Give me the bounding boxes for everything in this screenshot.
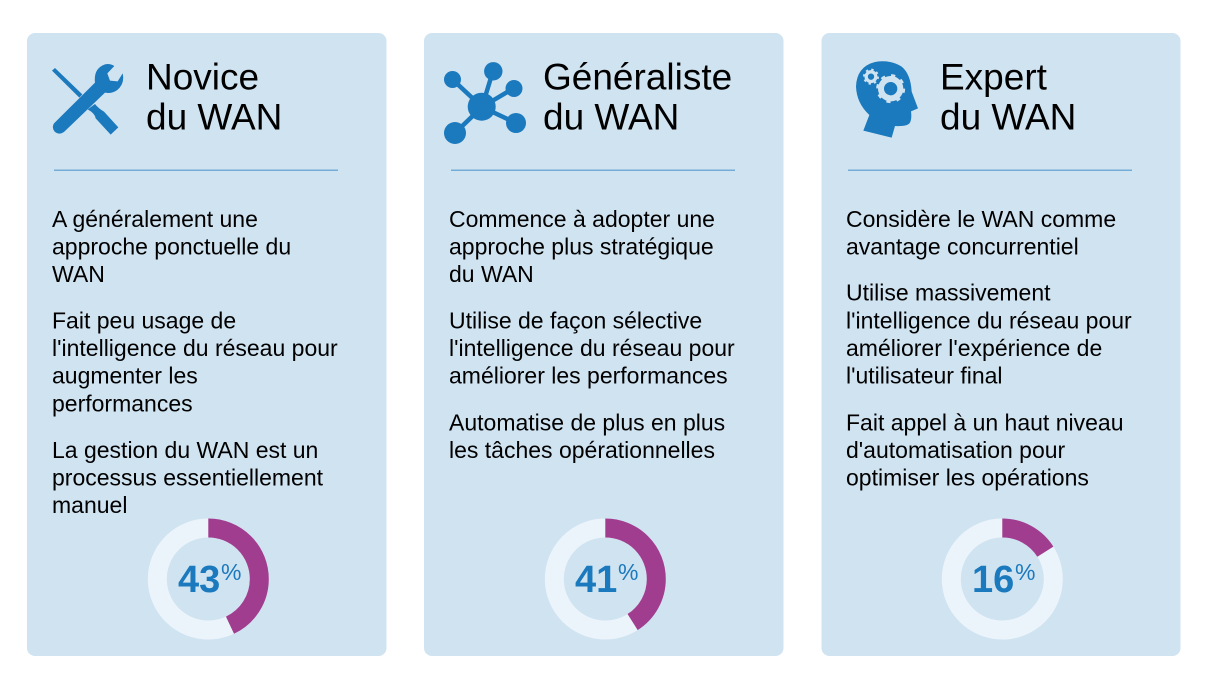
- text block: novice description: WAN: [52, 261, 105, 287]
- icon: wrench and screwdriver: [52, 64, 123, 135]
- text block: expert description: Utilise massivement: [846, 280, 1051, 306]
- text block: expert description: optimiser les opérations: [846, 464, 1089, 490]
- title: expert: Expert: [940, 56, 1048, 98]
- donut chart: 43 percent: %: [221, 559, 241, 585]
- donut chart: 16 percent: [951, 528, 1053, 630]
- title: novice: du WAN: [146, 96, 282, 138]
- text block: expert description: améliorer l'expérience de: [846, 335, 1102, 361]
- text block: novice description: processus essentiellement: [52, 464, 324, 490]
- text block: novice description: [52, 206, 338, 518]
- title: novice: Novice: [146, 56, 259, 98]
- donut chart: 16 percent: %: [1015, 559, 1035, 585]
- text block: expert description: [846, 206, 1132, 490]
- icon: head with gears: [856, 61, 918, 138]
- title: novice: [146, 56, 282, 138]
- text block: generaliste description: améliorer les performances: [449, 362, 728, 388]
- donut chart: 43 percent: [157, 528, 259, 630]
- text block: expert description: avantage concurrentiel: [846, 234, 1079, 260]
- text block: expert description: l'intelligence du réseau pour: [846, 308, 1132, 334]
- text block: expert description: d'automatisation pour: [846, 437, 1066, 463]
- text block: generaliste description: l'intelligence du réseau pour: [449, 335, 735, 361]
- text block: novice description: l'intelligence du réseau pour: [52, 335, 338, 361]
- text block: generaliste description: Commence à adopter une: [449, 206, 715, 232]
- text block: novice description: La gestion du WAN est un: [52, 437, 318, 463]
- panel: generaliste: [424, 33, 784, 656]
- text block: generaliste description: approche plus stratégique: [449, 234, 714, 260]
- text block: novice description: augmenter les: [52, 362, 198, 388]
- donut chart: 43 percent: 43: [178, 559, 220, 601]
- title: expert: du WAN: [940, 96, 1076, 138]
- text block: expert description: l'utilisateur final: [846, 362, 1003, 388]
- text block: generaliste description: [449, 206, 735, 463]
- text block: novice description: manuel: [52, 492, 127, 518]
- text block: novice description: performances: [52, 390, 193, 416]
- title: generaliste: du WAN: [543, 96, 679, 138]
- donut chart: 16 percent: 16: [972, 559, 1014, 601]
- title: generaliste: [543, 56, 732, 138]
- panel: expert: [822, 33, 1180, 656]
- title: generaliste: Généraliste: [543, 56, 732, 98]
- donut chart: 41 percent: %: [618, 559, 638, 585]
- text block: generaliste description: Utilise de façon sélective: [449, 308, 702, 334]
- text block: novice description: approche ponctuelle du: [52, 234, 291, 260]
- icon: network: [444, 62, 526, 144]
- text block: generaliste description: Automatise de plus en plus: [449, 410, 725, 436]
- text block: novice description: A généralement une: [52, 206, 258, 232]
- panel: novice: [27, 33, 386, 656]
- donut chart: 41 percent: [554, 528, 656, 630]
- text block: novice description: Fait peu usage de: [52, 308, 236, 334]
- text block: expert description: Considère le WAN comme: [846, 206, 1116, 232]
- text block: generaliste description: les tâches opérationnelles: [449, 437, 715, 463]
- title: expert: [940, 56, 1076, 138]
- text block: expert description: Fait appel à un haut niveau: [846, 410, 1123, 436]
- text block: generaliste description: du WAN: [449, 261, 534, 287]
- donut chart: 41 percent: 41: [575, 559, 617, 601]
